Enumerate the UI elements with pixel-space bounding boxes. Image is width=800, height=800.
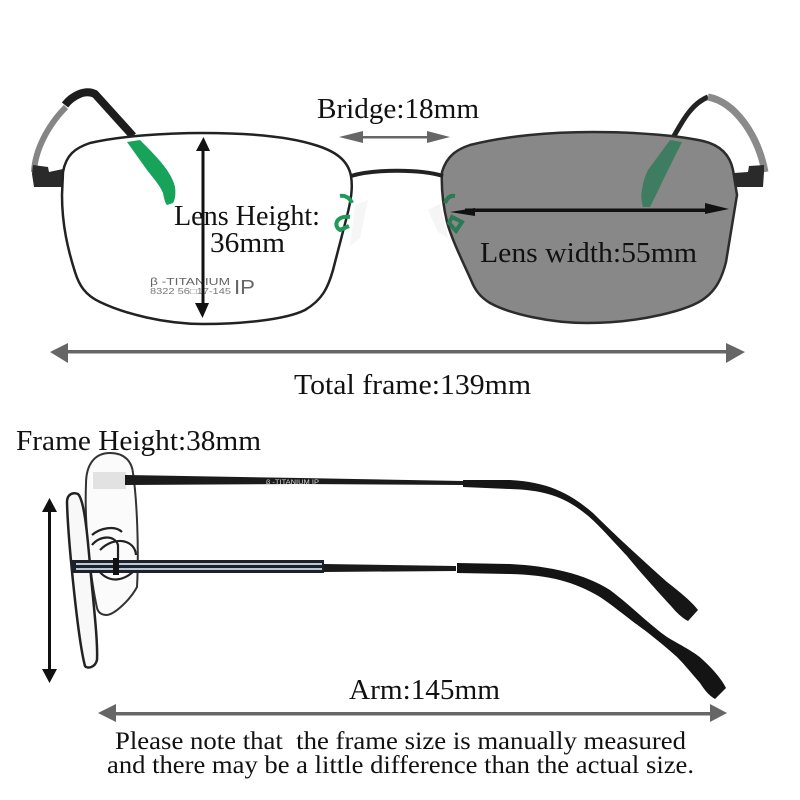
lens engraving bbox=[150, 277, 255, 299]
disclaimer note: Please note that the frame size is manually measured bbox=[115, 728, 687, 755]
right temple arm behind lens bbox=[674, 97, 765, 172]
far temple arm bbox=[125, 475, 698, 621]
lens engraving: β -TITANIUM bbox=[150, 277, 230, 288]
total frame label: Total frame:139mm bbox=[294, 370, 531, 401]
left hinge bbox=[32, 165, 63, 187]
bridge bbox=[351, 171, 443, 176]
far lens side bbox=[86, 453, 138, 615]
lens width arrow bbox=[450, 203, 729, 216]
disclaimer note bbox=[107, 728, 694, 779]
frame height label: Frame Height:38mm bbox=[16, 426, 261, 457]
lens height arrow bbox=[195, 137, 210, 318]
green temple tip through tint bbox=[641, 140, 682, 207]
tinted top of far lens bbox=[93, 472, 126, 489]
near temple arm bbox=[72, 558, 726, 699]
frame height arrow bbox=[42, 498, 57, 683]
arm arrow bbox=[98, 704, 727, 722]
right hinge bbox=[734, 165, 764, 187]
total frame arrow bbox=[50, 343, 745, 363]
far temple arm: β -TITANIUM IP bbox=[266, 480, 319, 486]
lens height label bbox=[174, 201, 320, 259]
left lens green temple tip bbox=[127, 140, 175, 205]
near lens side bbox=[67, 493, 97, 668]
bridge label: Bridge:18mm bbox=[317, 94, 479, 125]
lens height label: 36mm bbox=[210, 228, 285, 259]
side view of glasses bbox=[67, 453, 726, 699]
lens engraving: 8322 56□17-145 bbox=[150, 287, 232, 296]
disclaimer note: and there may be a little difference than the actual size. bbox=[107, 752, 694, 779]
lens engraving: IP bbox=[234, 277, 255, 299]
left temple arm behind lens bbox=[34, 92, 133, 172]
right lens tinted bbox=[442, 132, 737, 323]
nose pad assembly bbox=[92, 528, 136, 579]
lens width label: Lens width:55mm bbox=[480, 238, 697, 269]
lens height label: Lens Height: bbox=[174, 201, 320, 232]
front view of glasses bbox=[32, 92, 765, 324]
left lens frame bbox=[62, 133, 352, 324]
bridge arrow bbox=[339, 131, 450, 143]
arm label: Arm:145mm bbox=[349, 675, 500, 706]
nose pads bbox=[336, 196, 462, 246]
